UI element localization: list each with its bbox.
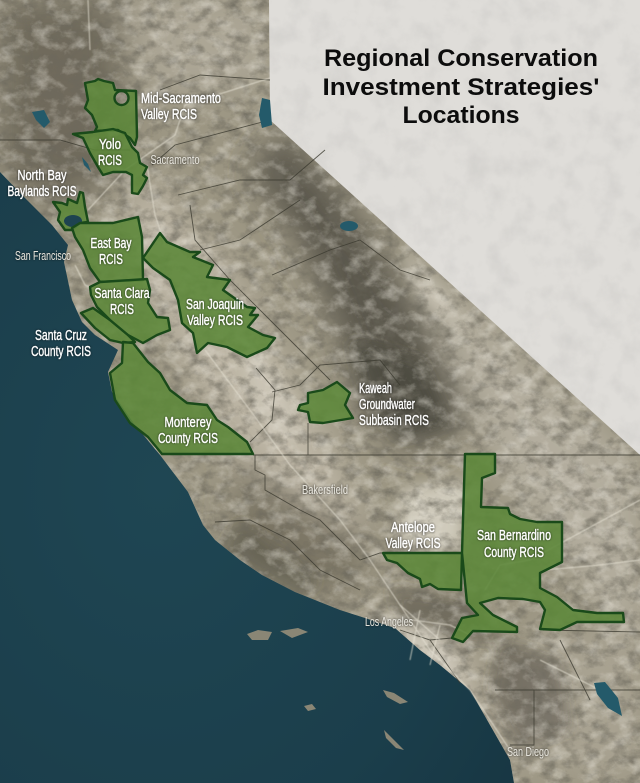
region: Santa Cruz County — [81, 308, 135, 343]
region: Yolo — [73, 129, 147, 194]
island: San Clemente — [384, 730, 404, 750]
islands — [247, 628, 408, 750]
label: Antelope Valley RCIS — [386, 520, 440, 552]
island: San Nicolas — [304, 704, 316, 711]
city: San Diego: San Diego — [507, 745, 549, 759]
label: Mid-Sacramento Valley RCIS: Mid-Sacramento — [141, 91, 221, 107]
label: Kaweah Groundwater Subbasin RCIS: Kaweah — [359, 381, 392, 397]
label: North Bay Baylands RCIS: Baylands RCIS — [8, 184, 76, 200]
label: Mid-Sacramento Valley RCIS — [141, 91, 221, 123]
label: San Joaquin Valley RCIS: San Joaquin — [186, 297, 244, 313]
region: San Joaquin Valley — [143, 233, 275, 357]
island: Santa Catalina — [383, 690, 408, 704]
region: Santa Clara — [90, 279, 170, 343]
label: East Bay RCIS — [90, 236, 132, 268]
label: East Bay RCIS: RCIS — [99, 252, 123, 268]
label: Santa Clara RCIS: RCIS — [110, 302, 134, 318]
heading — [322, 45, 600, 129]
label: Yolo RCIS: RCIS — [98, 153, 122, 169]
region: Monterey County — [110, 342, 253, 454]
label: Santa Clara RCIS — [94, 286, 150, 318]
label: Kaweah Groundwater Subbasin RCIS: Subbasin RCIS — [359, 413, 429, 429]
city: Los Angeles: Los Angeles — [365, 615, 413, 629]
label: Monterey County RCIS — [158, 415, 218, 447]
heading: Regional Conservation — [324, 45, 598, 72]
San Pablo Bay — [64, 215, 82, 227]
label: Mid-Sacramento Valley RCIS: Valley RCIS — [141, 107, 197, 123]
lake: Berryessa — [82, 157, 91, 172]
label: San Bernardino County RCIS: San Bernardino — [477, 528, 551, 544]
label: Santa Cruz County RCIS — [31, 328, 91, 360]
lake: Mono — [340, 221, 358, 231]
label: East Bay RCIS: East Bay — [90, 236, 132, 252]
label: San Bernardino County RCIS: County RCIS — [484, 545, 544, 561]
heading: Investment Strategies' — [322, 74, 600, 101]
lake: Tahoe — [259, 98, 272, 128]
heading: Locations — [402, 102, 520, 129]
region: Kaweah Groundwater Subbasin — [298, 382, 353, 423]
label: Monterey County RCIS: County RCIS — [158, 431, 218, 447]
region: San Bernardino County — [452, 454, 624, 642]
Nevada pale area — [269, 0, 640, 455]
label: Antelope Valley RCIS: Valley RCIS — [386, 536, 440, 552]
label: Santa Clara RCIS: Santa Clara — [94, 286, 150, 302]
region: Mid-Sacramento Valley — [85, 79, 137, 145]
region: East Bay — [72, 217, 143, 282]
label: Kaweah Groundwater Subbasin RCIS — [359, 381, 429, 429]
lake: Salton Sea — [594, 682, 622, 716]
label: Kaweah Groundwater Subbasin RCIS: Groundwater — [359, 397, 415, 413]
label: Yolo RCIS: Yolo — [99, 137, 121, 153]
label: Yolo RCIS — [98, 137, 122, 169]
label: North Bay Baylands RCIS: North Bay — [18, 168, 67, 184]
region: North Bay Baylands — [53, 192, 88, 230]
city: San Francisco: San Francisco — [15, 249, 71, 263]
label: San Bernardino County RCIS — [477, 528, 551, 561]
city: Sacramento: Sacramento — [150, 153, 200, 167]
region: Antelope Valley — [383, 553, 462, 590]
lakes — [32, 98, 622, 716]
label: Antelope Valley RCIS: Antelope — [391, 520, 435, 536]
label: Santa Cruz County RCIS: Santa Cruz — [35, 328, 87, 344]
lake: Clear Lake — [32, 110, 50, 128]
label: North Bay Baylands RCIS — [8, 168, 76, 200]
island: Santa Cruz and Anacapa — [247, 628, 308, 640]
label: Monterey County RCIS: Monterey — [164, 415, 212, 431]
label: San Joaquin Valley RCIS: Valley RCIS — [187, 313, 243, 329]
label: Santa Cruz County RCIS: County RCIS — [31, 344, 91, 360]
label: San Joaquin Valley RCIS — [186, 297, 244, 329]
city: Bakersfield: Bakersfield — [302, 483, 348, 497]
